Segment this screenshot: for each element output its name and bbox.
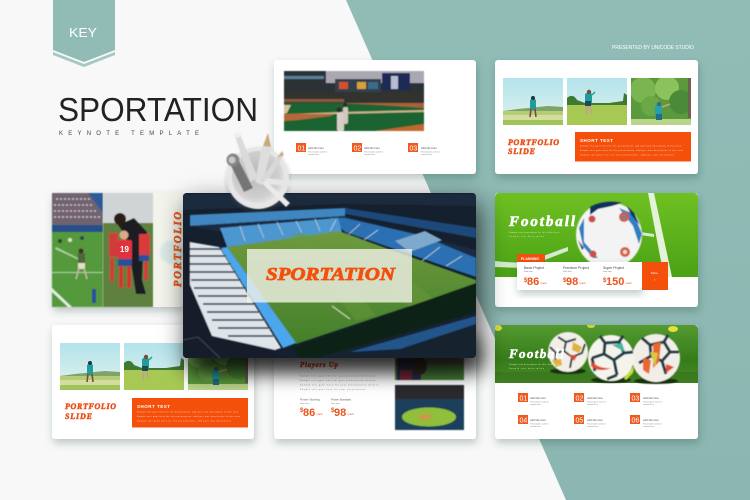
more button [642,262,668,290]
football heading: Football [508,346,564,361]
numbered item 05: 05 [576,418,583,424]
main panel shadow [192,342,482,372]
shirt number: 19 [120,245,129,254]
players up heading: Players Up [300,361,338,369]
football heading: Sample text description for this slide here [509,363,560,366]
key badge [53,0,115,67]
numbered item 05: sample here [587,426,599,428]
numbered item 03: Presentation sub text [643,400,662,404]
golf photo 2 [124,343,184,390]
main title: SPORTATION [266,264,396,284]
pricing panel: 98 [566,276,578,288]
pricing panel: Start from [524,270,533,273]
numbered item 01: 01 [298,146,305,152]
stadium photo [183,193,476,358]
numbered item 02: Presentation sub text [364,150,383,154]
pricing panel: $ [563,278,567,284]
numbered item 04 [518,415,549,428]
numbered item 01: sample here [308,154,320,156]
orange text box: SHORT TEXT [580,138,613,143]
baseball stadium photo [284,71,424,131]
price 98 [331,398,354,419]
golf photo 1 [60,343,120,390]
numbered item 03: 03 [410,146,417,152]
price 86: Start from [300,402,309,405]
numbered item 02 [574,393,606,406]
golf photo 3 [630,76,693,125]
price 98: Power Standard [331,398,351,402]
title: SPORTATION [58,91,258,128]
numbered item 05 [574,415,606,428]
numbered item 02: sample here [587,404,599,406]
price 86: $ [300,408,304,414]
football turf photo [494,324,698,383]
football heading: Sample text description [509,235,544,238]
price 98: 98 [334,407,346,419]
portfolio heading: PORTFOLIO [65,402,116,411]
body text: Sample text goes here for your presentation [300,388,365,391]
price 98: / pack [347,413,354,416]
golf photo 2 [567,78,627,125]
pricing panel: 86 [527,276,539,288]
three soccer balls [548,332,680,384]
numbered item 02: 02 [576,396,583,402]
numbered item 03: sample here [643,404,655,406]
studio credit: PRESENTED BY UNICODE STUDIO [612,45,694,51]
panel: portfolio photo slide left [52,193,184,307]
portfolio faded photo [160,240,184,264]
portfolio heading: PORTFOLIO [508,138,559,147]
price 86: / pack [316,413,323,416]
pricing panel: Start from [563,270,572,273]
numbered item 03 [630,393,662,406]
numbered item 02: Add title here [364,146,380,150]
soccer ball [576,202,642,268]
photo: night stadium [395,385,464,430]
numbered item 01 [518,393,549,406]
numbered item 02: Add title here [587,396,603,400]
more button: More [651,271,658,275]
numbered item 05: Presentation sub text [587,422,606,426]
orange text box: Sample text goes here for the presentation, add your own description to this area [137,415,241,418]
key badge: KEY [69,25,97,40]
pricing panel: / pack [625,282,632,285]
price 86: 86 [303,407,315,419]
numbered item 06 [630,415,662,428]
body text: Sample text goes here for your presentation details [300,374,375,378]
football pitch photo [495,193,698,277]
price 98: Start from [331,402,340,405]
numbered item 01: Presentation sub text [308,150,327,154]
portfolio heading: SLIDE [508,147,535,156]
numbered item 06: 06 [632,418,639,424]
panel: players up slide [274,330,476,439]
football heading: Sample text description for this slide here [509,231,560,234]
numbered item 03: Add title here [643,396,659,400]
panel: football items slide [494,324,698,439]
pricing panel: / pack [540,282,547,285]
body text: Sample text goes here for your presentation details [300,379,375,382]
subtitle: KEYNOTE TEMPLATE [59,131,199,137]
numbered item 02 [352,143,383,156]
numbered item 02: sample here [364,154,376,156]
numbered item 03: Presentation sub text [421,150,440,154]
price 86 [300,398,323,419]
body text: Sample text goes here for your presentation details [300,384,378,386]
pricing panel: $ [603,278,607,284]
numbered item 03 [408,143,440,156]
orange text box: Sample text goes here for the presentation, add your own description [137,420,231,422]
body text [300,374,378,391]
portfolio heading: SLIDE [65,412,92,421]
numbered item 01: Add title here [530,396,546,400]
football heading: Sample text description [509,367,544,370]
numbered item 01: Add title here [308,146,324,150]
pricing panel: Basic Project [524,266,544,270]
numbered item 06: Presentation sub text [643,422,662,426]
numbered item 03: Add title here [421,146,437,150]
numbered item 05: Add title here [587,418,603,422]
more button: › [654,277,656,282]
football heading: Football [508,214,576,230]
numbered item 02: 02 [354,146,361,152]
orange text box: SHORT TEXT [137,404,170,409]
numbered item 06: Add title here [643,418,659,422]
orange text box: Sample text goes here for the presentation, add your own description to this area [580,149,684,152]
planning tab: PLANNING [521,257,539,261]
orange text box [132,398,248,428]
price 86: Power Starting [300,398,320,402]
orange text box: Sample text goes here for the presentation, add your own description to this area [137,410,239,414]
panel: football pricing slide [495,193,698,307]
numbered item 03: 03 [632,396,639,402]
photo: spectator [395,355,464,380]
portfolio heading [508,138,559,156]
pricing panel: / pack [579,282,586,285]
numbered item 04: 04 [520,418,527,424]
pricing panel: 150 [606,276,624,288]
numbered item 01 [296,143,327,156]
panel: portfolio slide bottom left [52,325,254,439]
football heading [508,214,576,238]
golf photo 1 [503,78,563,125]
orange text box [575,132,691,162]
numbered item 04: Presentation sub text [530,422,549,426]
numbered item 04: sample here [530,426,542,428]
price 98: $ [331,408,335,414]
panel: portfolio slide top right [495,60,698,174]
photo: coach with players [103,193,153,307]
pricing panel: Premium Project [563,266,589,270]
portfolio heading [65,402,116,421]
panel: baseball slide [274,60,476,174]
football heading [508,346,564,370]
teal diagonal background shape [346,0,750,500]
numbered item 04: Add title here [530,418,546,422]
golf photo 3 [187,341,250,390]
orange text box: Sample text goes here for the presentation, add your own description [580,154,674,156]
photo: match in stadium [52,193,103,307]
numbered item 06: sample here [643,426,655,428]
icon: pencil cup [225,132,293,213]
pricing panel: $ [524,278,528,284]
numbered item 01: sample here [530,404,542,406]
numbered item 02: Presentation sub text [587,400,606,404]
planning tab [517,254,545,262]
pricing panel: Super Project [603,266,624,270]
portfolio vertical label: PORTFOLIO [173,212,184,287]
pricing panel: Start from [603,270,612,273]
translucent title plate [247,249,412,302]
pricing panel [517,262,642,290]
orange text box: Sample text goes here for the presentation, add your own description to this area [580,144,682,148]
numbered item 01: Presentation sub text [530,400,549,404]
numbered item 01: 01 [520,396,527,402]
numbered item 03: sample here [421,154,433,156]
main stadium panel [183,193,476,358]
